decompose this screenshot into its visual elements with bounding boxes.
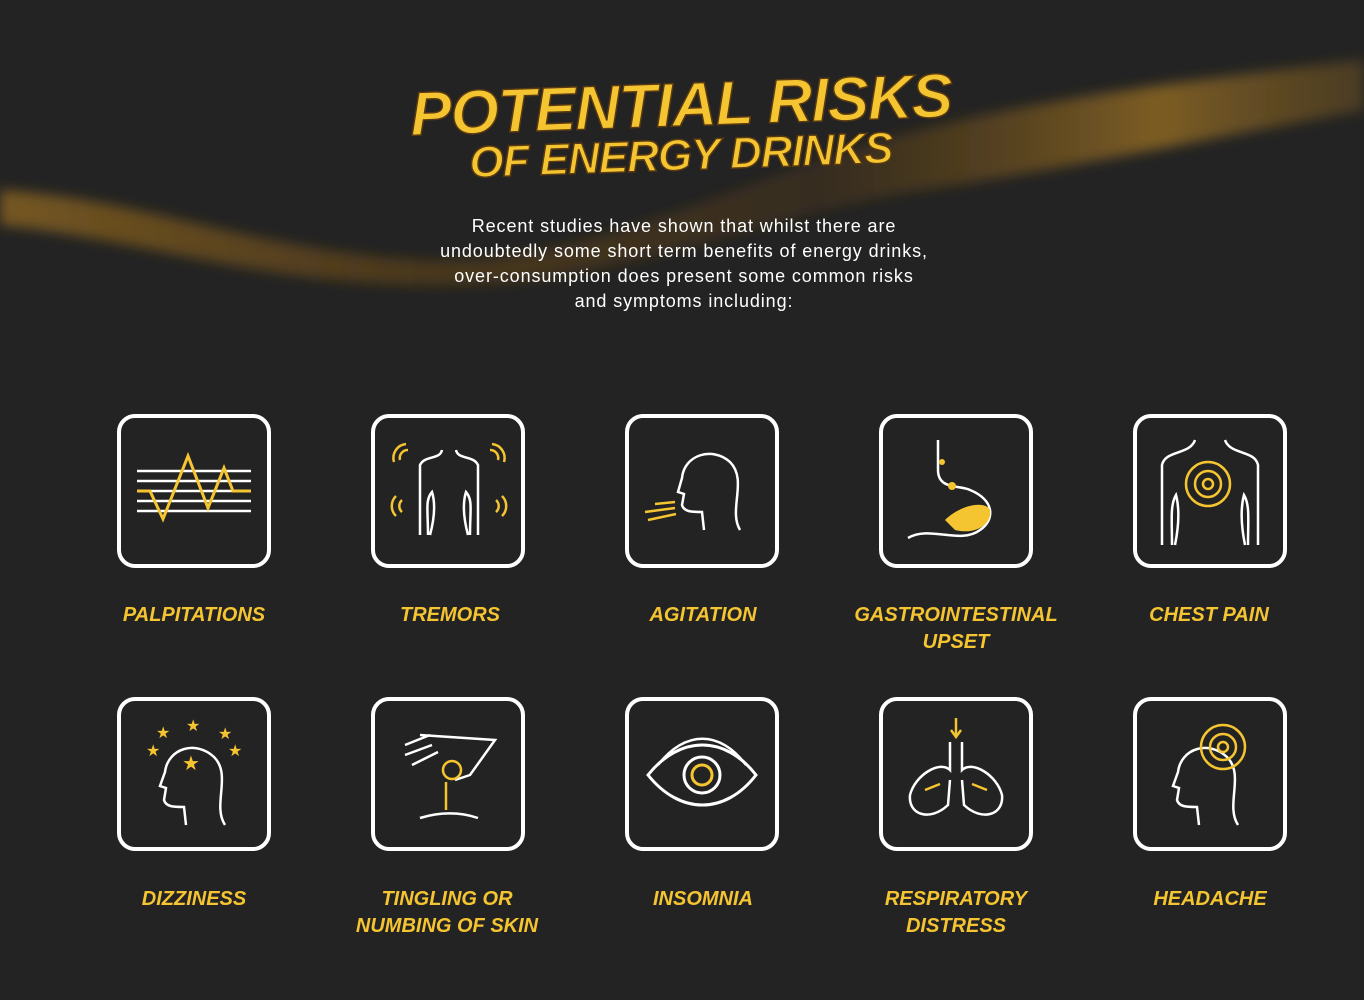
intro text: over-consumption does present some common risks xyxy=(454,266,914,286)
icon: dizziness: ★ xyxy=(218,724,232,743)
labels: HEADACHE xyxy=(1153,888,1267,910)
icon: dizziness xyxy=(119,699,269,849)
intro text xyxy=(440,216,928,311)
icon: tingling xyxy=(373,699,523,849)
labels: NUMBING OF SKIN xyxy=(356,915,539,937)
labels: DISTRESS xyxy=(906,915,1007,937)
icon: dizziness: ★ xyxy=(182,751,200,775)
labels: AGITATION xyxy=(648,604,757,626)
labels: DIZZINESS xyxy=(142,888,247,910)
icon: insomnia xyxy=(627,699,777,849)
intro text: Recent studies have shown that whilst there are xyxy=(472,216,896,236)
labels: GASTROINTESTINAL xyxy=(854,604,1058,626)
icon: dizziness: ★ xyxy=(186,716,200,735)
icon: chest pain xyxy=(1135,416,1285,566)
icon: agitation xyxy=(627,416,777,566)
icon: respiratory xyxy=(881,699,1031,849)
icon: gastrointestinal xyxy=(881,416,1031,566)
labels xyxy=(123,604,1269,937)
icon: dizziness: ★ xyxy=(146,741,160,760)
labels: RESPIRATORY xyxy=(885,888,1029,910)
icon: tremors xyxy=(373,416,523,566)
labels: PALPITATIONS xyxy=(123,604,266,626)
intro text: and symptoms including: xyxy=(575,291,793,311)
icon: dizziness: ★ xyxy=(228,741,242,760)
labels: UPSET xyxy=(923,631,991,653)
icon: headache xyxy=(1135,699,1285,849)
title: POTENTIAL RISKS xyxy=(409,61,954,149)
title: OF ENERGY DRINKS xyxy=(469,124,894,187)
icon: palpitations xyxy=(119,416,269,566)
title xyxy=(409,61,955,189)
labels: CHEST PAIN xyxy=(1149,604,1269,626)
icon: dizziness: ★ xyxy=(156,723,170,742)
liquid wave decoration xyxy=(0,60,1364,285)
labels: TINGLING OR xyxy=(381,888,513,910)
labels: INSOMNIA xyxy=(653,888,753,910)
labels: TREMORS xyxy=(400,604,501,626)
intro text: undoubtedly some short term benefits of energy drinks, xyxy=(440,241,928,261)
